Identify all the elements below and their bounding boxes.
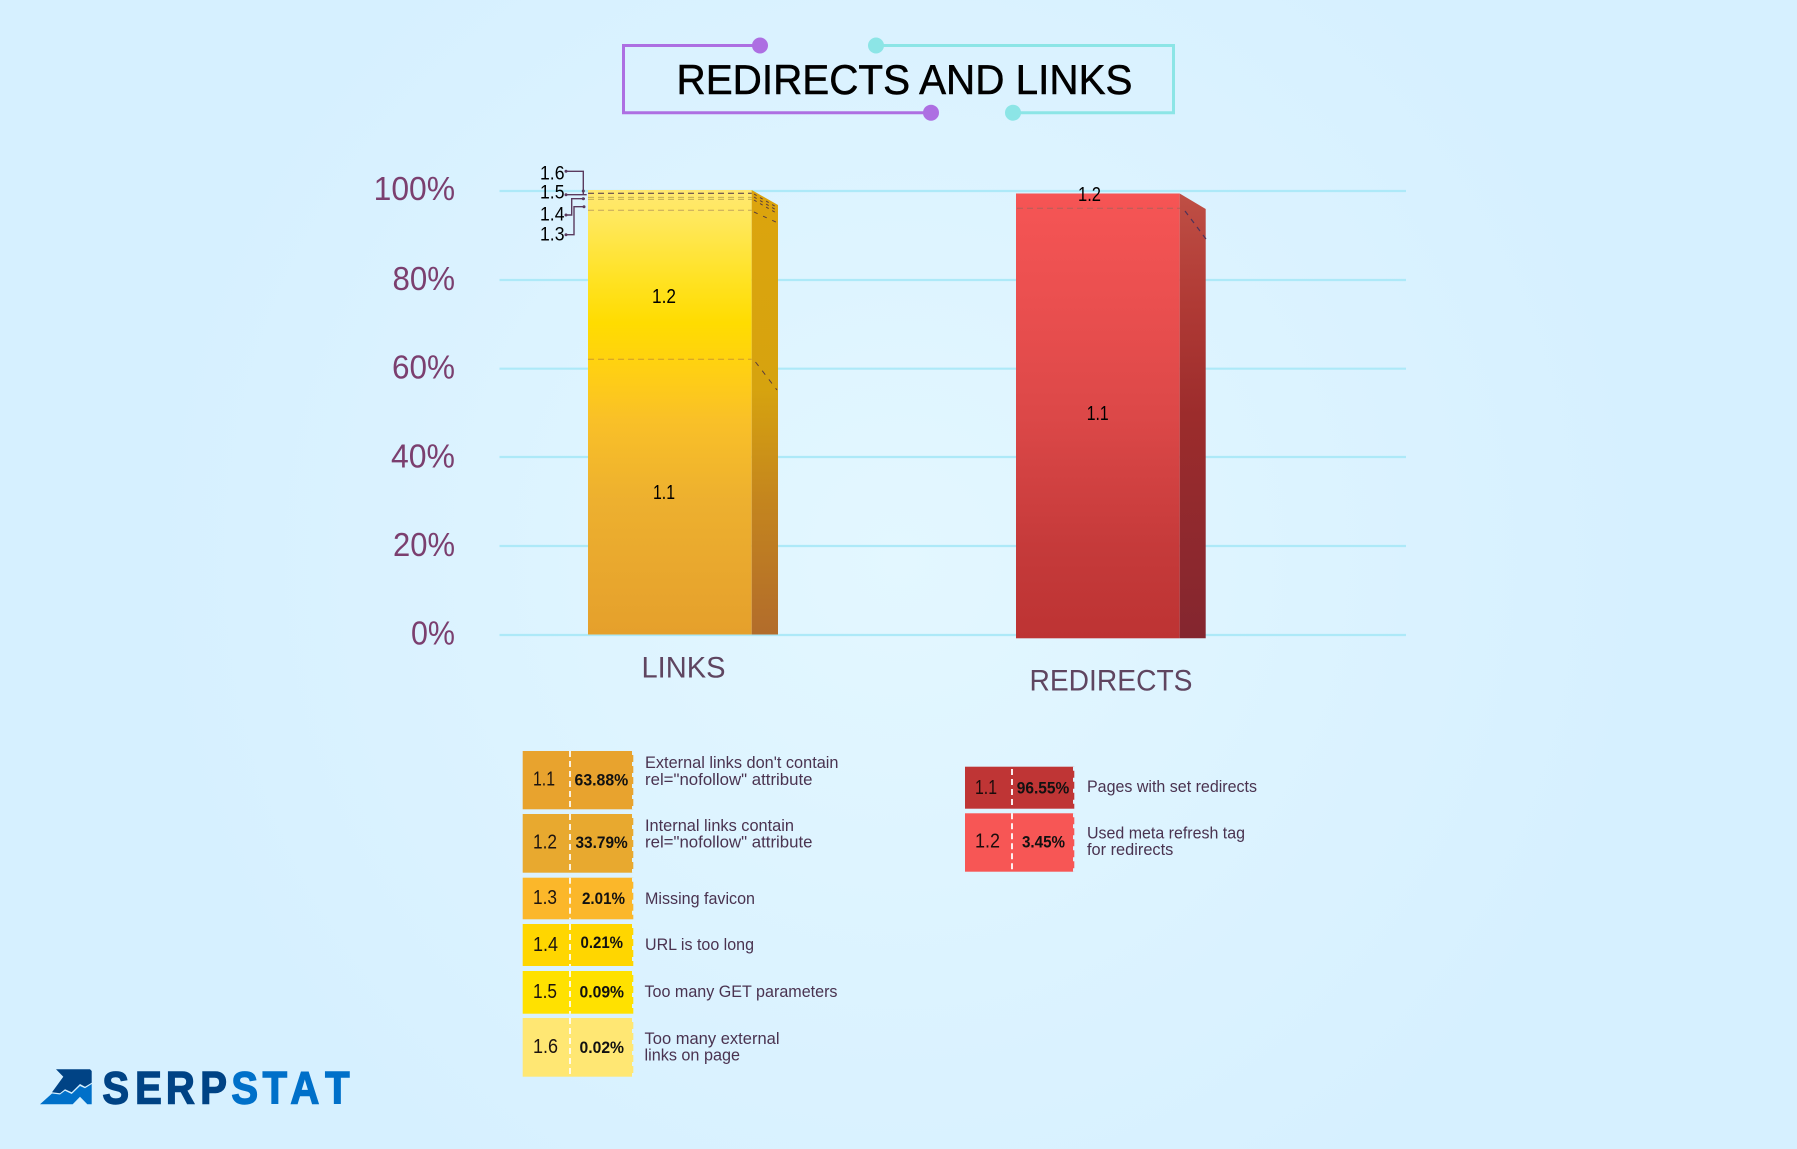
legend row 1.5: 0.09% [580,982,624,1001]
y axis labels: 40% [391,438,455,475]
legend row 1.6 [523,1018,780,1077]
logo wordmark [102,1063,350,1114]
legend row redirects 1.1: Pages with set redirects [1087,777,1257,796]
legend row 1.1 [523,751,838,809]
legend row redirects 1.2: 3.45% [1022,833,1065,852]
legend row 1.3: 1.3 [533,887,557,909]
links bar side [752,190,778,634]
callout labels [540,163,565,246]
legend row 1.5: 1.5 [533,981,557,1003]
redirects bar front [1016,194,1180,638]
title frame: purple [624,46,931,113]
title [624,38,1174,121]
callout labels: 1.3 [540,225,564,246]
legend row 1.2 [523,814,812,873]
grid lines [500,191,1406,635]
redirects segment labels: 1.2 [1078,184,1101,206]
bar: redirects: 1.1 [1087,403,1109,425]
legend row redirects 1.2: for redirects [1087,840,1173,859]
legend row 1.2: 33.79% [576,833,628,852]
legend: links [523,751,838,1077]
legend row 1.3 [523,878,755,919]
legend row 1.4 [523,924,754,966]
logo wordmark: STAT [231,1063,350,1114]
y axis labels: 20% [393,526,455,563]
segment boundary [1017,208,1206,239]
callout labels: 1.6 [540,163,564,184]
callout connectors [566,171,587,235]
legend row 1.2: rel="nofollow" attribute [645,832,812,852]
callout labels: 1.5 [540,182,564,203]
legend row redirects 1.1 [965,767,1257,809]
links segment labels: 1.2 [652,286,676,308]
legend row 1.6: links on page [644,1046,740,1064]
y axis labels: 80% [392,260,455,297]
legend row 1.3: 2.01% [582,889,625,908]
legend row redirects 1.1: 1.1 [975,777,997,799]
y axis labels: 0% [411,615,455,652]
legend row 1.6: 1.6 [533,1036,558,1058]
legend row redirects 1.2 [965,813,1245,872]
title frame: teal [876,46,1174,113]
links bar front [588,190,752,634]
legend row 1.2: 1.2 [533,832,557,854]
legend row 1.1: 1.1 [533,768,555,790]
legend row 1.1: 63.88% [574,770,628,789]
legend row redirects 1.2: 1.2 [975,831,1000,853]
bar chart [374,163,1406,698]
legend row redirects 1.2: Used meta refresh tag [1087,824,1245,842]
title dot: purple bottom [923,105,939,121]
legend row 1.2: Internal links contain [645,816,794,835]
bar: redirects [1016,184,1206,638]
y axis labels: 60% [392,349,455,386]
legend: redirects [965,767,1257,872]
logo wordmark: SERP [102,1063,227,1114]
y axis labels: 100% [374,170,455,207]
legend row 1.6: 0.02% [580,1038,624,1057]
callout dots [564,170,586,236]
y axis labels [374,170,455,652]
legend row 1.4: URL is too long [645,935,754,954]
legend row redirects 1.1: 96.55% [1017,778,1069,797]
bar: links: 1.1 [653,482,675,504]
x axis labels: LINKS [642,651,726,684]
legend row 1.5: Too many GET parameters [644,982,838,1001]
icon: logo arrow [40,1069,92,1104]
legend row 1.1: External links don't contain [645,753,838,772]
callout labels: 1.4 [540,205,565,226]
title dot: teal top [868,38,884,54]
legend row 1.3: Missing favicon [645,889,755,908]
legend row 1.5 [523,971,838,1014]
legend row 1.6: Too many external [644,1029,780,1048]
small segment callouts [540,163,587,246]
legend row 1.4: 1.4 [533,934,558,956]
bar: links [588,190,778,634]
legend row 1.4: 0.21% [580,933,623,952]
title dot: purple top [752,38,768,54]
title text: REDIRECTS AND LINKS [676,56,1132,103]
logo: serpstat [40,1063,350,1114]
segment boundaries [588,193,778,390]
x axis labels [642,651,1192,698]
legend row 1.1: rel="nofollow" attribute [645,770,812,789]
redirects bar side [1180,194,1206,638]
x axis labels: REDIRECTS [1030,665,1192,698]
title dot: teal bottom [1005,105,1021,121]
